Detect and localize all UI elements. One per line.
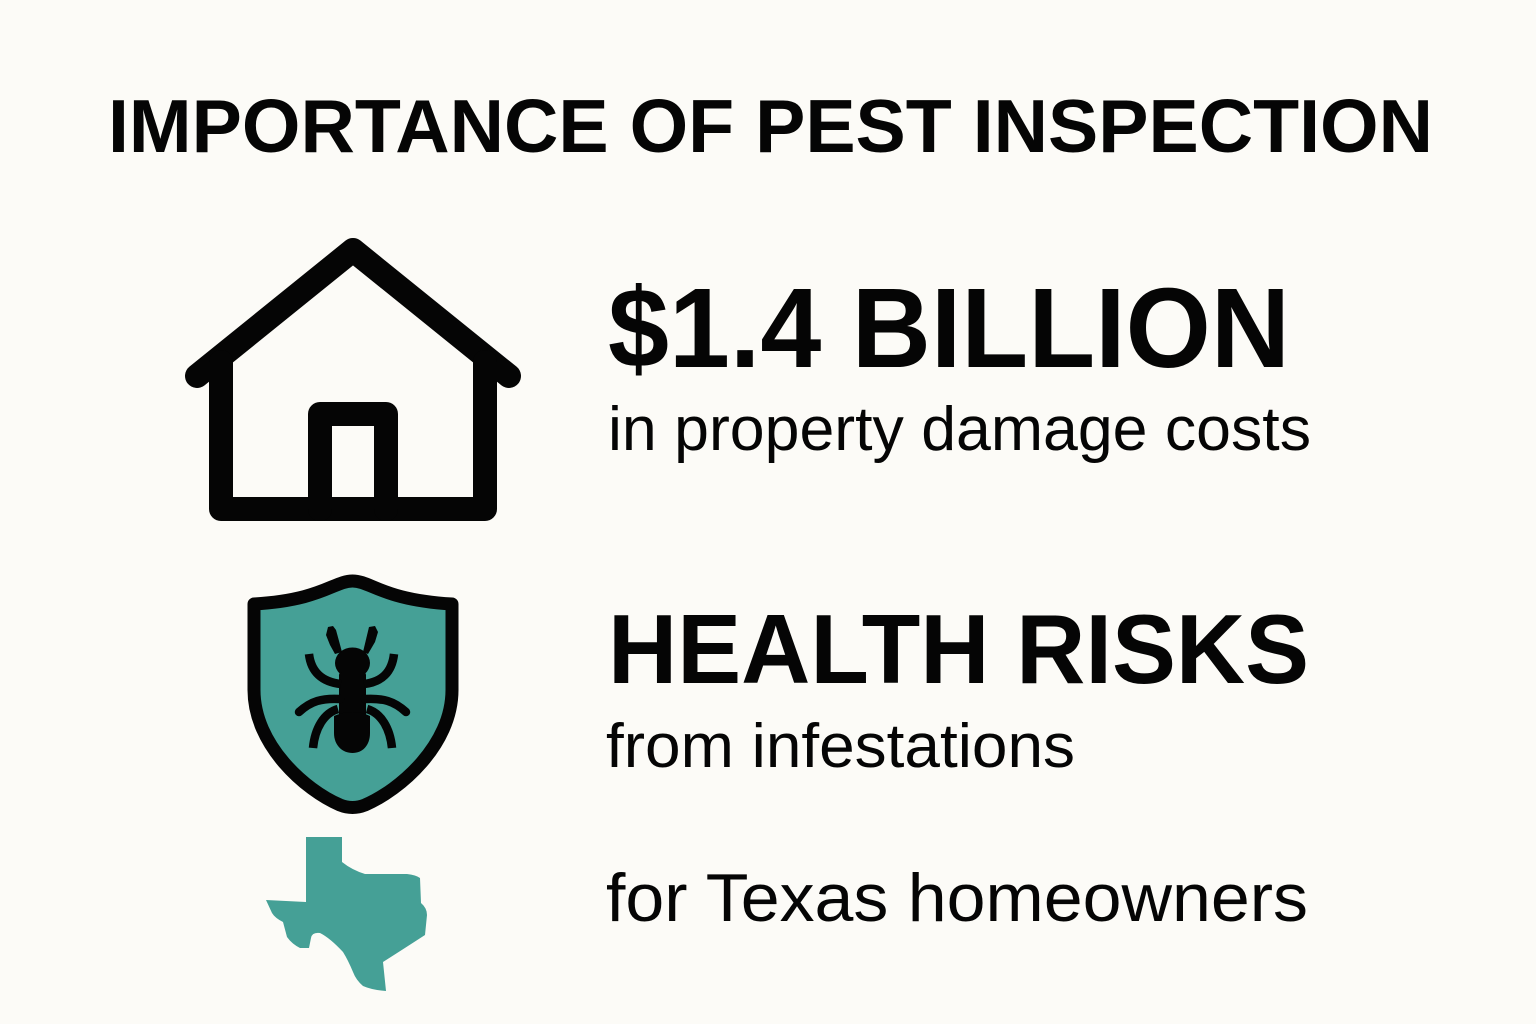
heading: health risks: HEALTH RISKS	[608, 594, 1309, 704]
icon: Texas map	[266, 837, 427, 991]
stat: property damage amount: $1.4 BILLION	[608, 265, 1290, 391]
text: Texas homeowners caption: for Texas homeowners	[606, 860, 1308, 936]
title: IMPORTANCE OF PEST INSPECTION	[108, 84, 1433, 168]
text: health risks caption: from infestations	[606, 712, 1075, 781]
icon: house	[197, 250, 509, 509]
text: property damage caption: in property damage costs	[608, 395, 1311, 464]
icon: shield with ant	[254, 581, 452, 808]
